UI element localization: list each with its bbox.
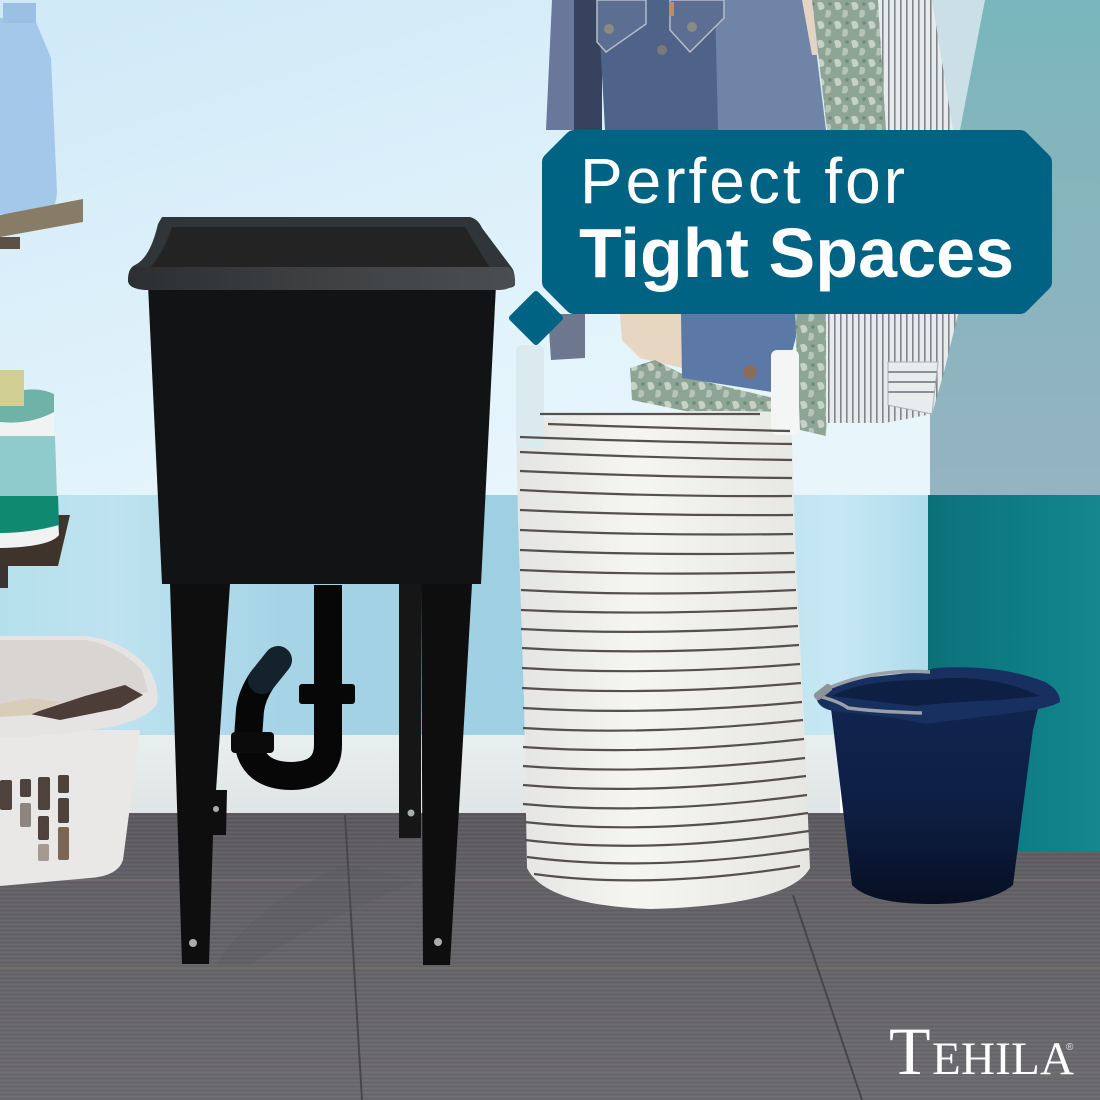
- bucket: [813, 667, 1060, 904]
- laundry basket: [0, 636, 158, 886]
- logo: Tehila: T: [889, 1013, 931, 1089]
- callout heading bold: Tight Spaces: [579, 214, 1014, 292]
- shelf items left: bottle: [0, 3, 83, 249]
- sink: tub body: [148, 285, 496, 584]
- background: baseboard: [118, 735, 840, 817]
- background: upper wall: [0, 0, 932, 497]
- sink: tub rim: [128, 217, 515, 290]
- callout heading: Perfect for: [580, 145, 905, 217]
- logo: Tehila: EHILA: [932, 1033, 1074, 1085]
- jacket pockets: [597, 0, 646, 52]
- callout: speech bubble: [508, 130, 1052, 346]
- clothes on rack: [546, 0, 958, 436]
- background: lower wall: [0, 495, 932, 740]
- logo: Tehila: [889, 1013, 1074, 1089]
- callout pointer diamond: [508, 290, 564, 346]
- logo: Tehila: ®: [1066, 1042, 1074, 1053]
- sink: drain trap pipe: [231, 585, 355, 776]
- sink: legs: [170, 584, 472, 965]
- laundry hamper: striped bag: [516, 345, 810, 909]
- shelf items left: wipes canister: [0, 370, 70, 588]
- curtain: teal fabric: [928, 0, 1100, 851]
- background: floor tiles: [0, 813, 1100, 1100]
- basket holes: [0, 775, 69, 861]
